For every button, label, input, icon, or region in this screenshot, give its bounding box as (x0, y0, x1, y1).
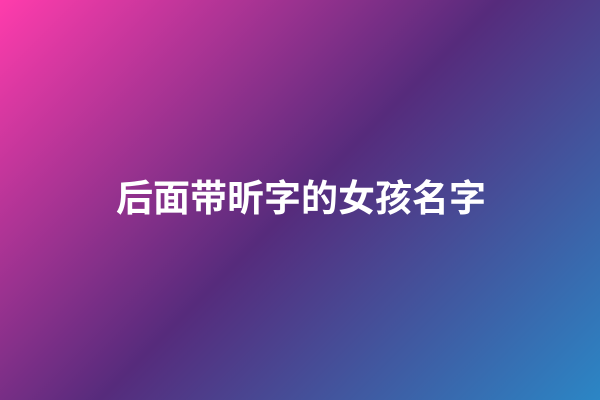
title: 后面带昕字的女孩名字 (116, 178, 486, 219)
